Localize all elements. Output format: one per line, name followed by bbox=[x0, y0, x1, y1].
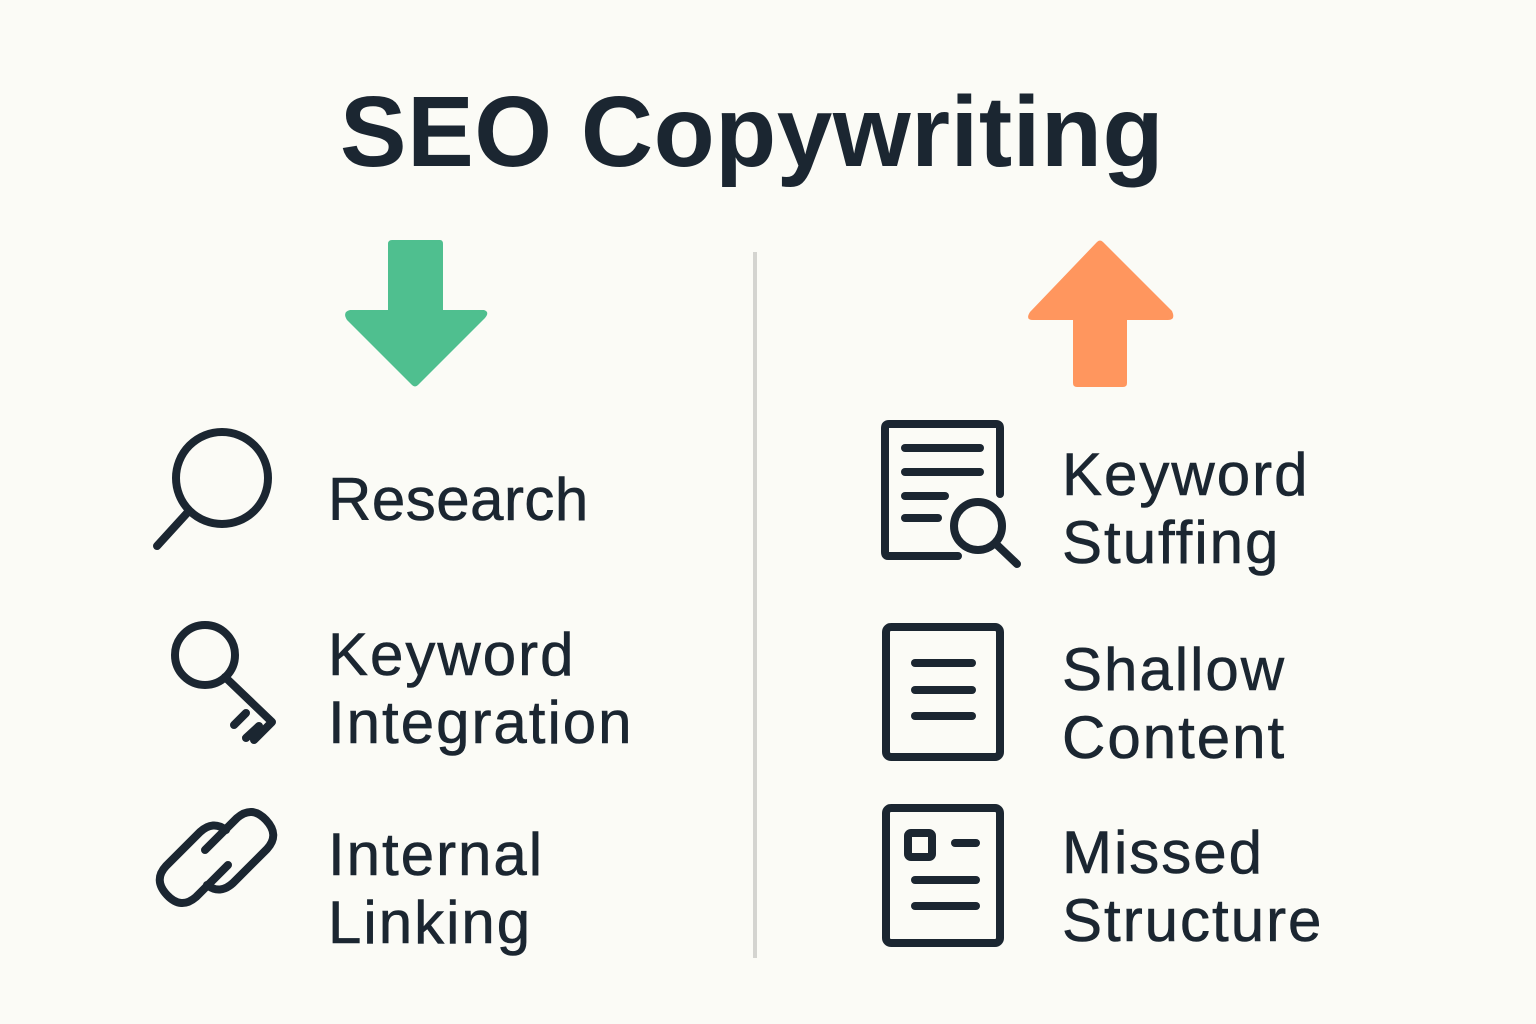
arrow: green down bbox=[345, 240, 487, 386]
label: Missed Structure: Missed bbox=[1062, 819, 1264, 886]
icon: doc with magnifier bbox=[885, 424, 1017, 564]
label: Shallow Content: Content bbox=[1062, 704, 1286, 771]
label: Keyword Integration: Keyword bbox=[328, 621, 575, 688]
divider bbox=[753, 252, 757, 958]
label: Internal Linking bbox=[328, 821, 544, 956]
icon: key bbox=[175, 625, 272, 740]
label: Missed Structure bbox=[1062, 819, 1323, 954]
label: Keyword Stuffing: Keyword bbox=[1062, 441, 1309, 508]
label: Keyword Integration bbox=[328, 621, 634, 756]
label: Keyword Stuffing bbox=[1062, 441, 1309, 576]
label: Keyword Stuffing: Stuffing bbox=[1062, 509, 1280, 576]
label: Shallow Content: Shallow bbox=[1062, 636, 1286, 703]
label: Internal Linking: Internal bbox=[328, 821, 544, 888]
icon: chain link bbox=[160, 812, 273, 903]
icon: magnifier bbox=[157, 432, 268, 546]
label: Shallow Content bbox=[1062, 636, 1286, 771]
icon: structured document bbox=[886, 808, 1000, 943]
arrow: orange up bbox=[1028, 240, 1173, 387]
label: Keyword Integration: Integration bbox=[328, 689, 634, 756]
icon: document lines bbox=[886, 627, 1000, 757]
title: SEO Copywriting bbox=[340, 76, 1164, 188]
label: Research: Research bbox=[328, 466, 589, 533]
label: Missed Structure: Structure bbox=[1062, 887, 1323, 954]
label: Internal Linking: Linking bbox=[328, 889, 532, 956]
